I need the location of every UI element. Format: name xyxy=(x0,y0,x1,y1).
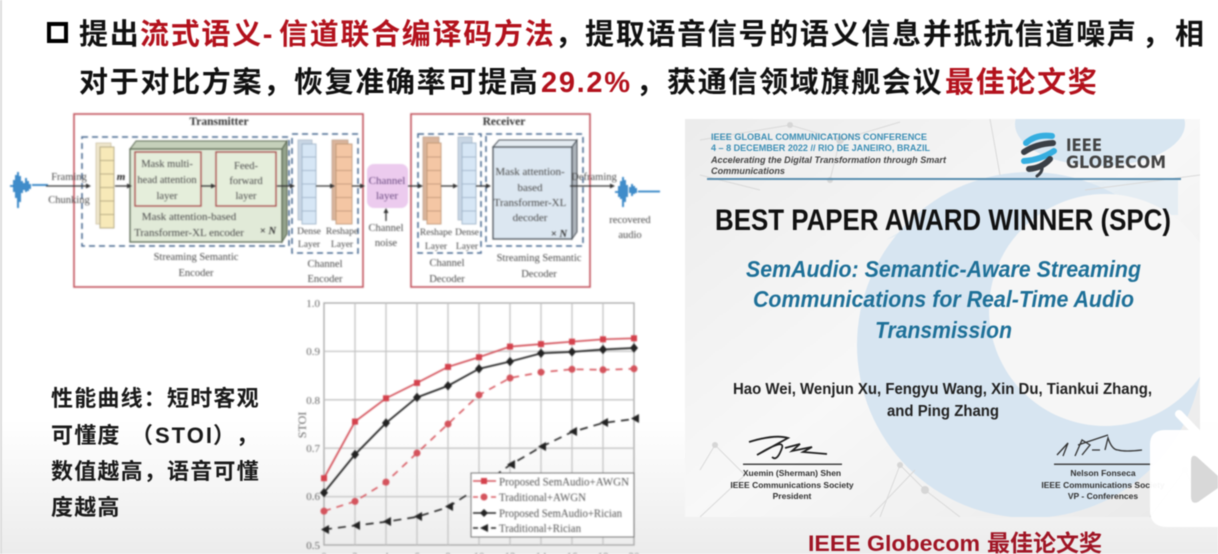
conference details: Accelerating the Digital Transformation through Smart xyxy=(710,155,947,165)
channel encoder group xyxy=(292,134,358,285)
heading line 2: 获通信领域旗舰会议 xyxy=(667,66,943,99)
series: proposed awgn xyxy=(321,335,637,481)
signature: president: Xuemin (Sherman) Shen xyxy=(743,468,841,478)
performance note: 性能曲线：短时客观 xyxy=(51,386,260,411)
heading xyxy=(49,18,1206,99)
streaming semantic encoder group xyxy=(82,137,289,246)
decoder block xyxy=(493,140,577,240)
decoder caption: Decoder xyxy=(521,269,557,280)
channel encoder labels xyxy=(297,227,358,285)
conference details: Communications xyxy=(711,166,785,176)
series: traditional rician xyxy=(321,414,639,534)
conference details: IEEE GLOBAL COMMUNICATIONS CONFERENCE xyxy=(711,132,927,142)
channel decoder labels: Decoder xyxy=(429,274,465,285)
recovered audio label: recovered xyxy=(609,215,651,226)
heading line 2: 29.2% xyxy=(541,67,632,99)
channel decoder labels: Layer xyxy=(425,242,448,252)
heading line 1: 相 xyxy=(1175,18,1206,51)
globecom wordmark: GLOBECOM xyxy=(1066,153,1166,173)
feed-forward layer: Feed- xyxy=(234,161,258,172)
signature: vp conferences xyxy=(1041,435,1165,501)
reshape layer stack xyxy=(332,140,352,224)
waveform: recovered audio xyxy=(615,177,660,207)
performance note: 可懂度 xyxy=(51,423,121,448)
panel: receiver xyxy=(411,114,590,287)
recovered audio label: audio xyxy=(618,230,642,241)
encoder label: Transformer-XL encoder xyxy=(134,227,244,239)
channel encoder labels: Layer xyxy=(331,240,354,250)
authors: Hao Wei, Wenjun Xu, Fengyu Wang, Xin Du, Tiankui Zhang, xyxy=(733,381,1152,398)
channel layer: layer xyxy=(376,190,398,202)
channel decoder labels: Dense xyxy=(455,228,479,238)
waveform: input audio xyxy=(10,172,48,208)
y axis labels: 0.5 xyxy=(306,540,320,552)
paper title: Communications for Real-Time Audio xyxy=(753,286,1134,312)
y axis title: STOI xyxy=(295,412,309,438)
encoder caption: Streaming Semantic xyxy=(154,252,239,263)
channel encoder labels: Reshape xyxy=(326,227,358,237)
heading line 2: ， xyxy=(636,67,667,99)
decoder block: based xyxy=(517,182,543,194)
series: proposed rician xyxy=(320,343,638,497)
heading line 1: ， xyxy=(555,19,586,51)
paper title xyxy=(746,256,1141,343)
decoder block: Transformer-XL xyxy=(494,197,567,209)
mask multi-head attention layer: layer xyxy=(156,191,178,202)
dense layer stack xyxy=(298,140,316,224)
channel noise label xyxy=(368,223,404,249)
mask multi-head attention layer: head attention xyxy=(137,175,197,186)
decoder caption xyxy=(497,253,582,280)
paper title: SemAudio: Semantic-Aware Streaming xyxy=(746,256,1141,282)
mask multi-head attention layer xyxy=(135,152,201,206)
legend: traditional awgn: Traditional+AWGN xyxy=(499,490,586,504)
decoder block: decoder xyxy=(513,212,548,224)
encoder label: Mask attention-based xyxy=(142,211,237,223)
performance note: STOI xyxy=(155,423,214,448)
decoder caption: Streaming Semantic xyxy=(497,253,582,264)
y axis labels: 0.7 xyxy=(306,443,320,455)
framing and chunking labels xyxy=(48,172,90,206)
legend: proposed awgn: Proposed SemAudio+AWGN xyxy=(499,474,629,488)
authors xyxy=(733,381,1152,420)
channel encoder labels: Layer xyxy=(298,240,321,250)
y axis labels: 0.9 xyxy=(306,346,320,358)
recovered audio label xyxy=(609,215,651,241)
input frame stack xyxy=(96,143,114,228)
signature: president: President xyxy=(773,491,812,501)
authors: and Ping Zhang xyxy=(887,403,999,420)
header rule xyxy=(707,178,1181,180)
certificate background xyxy=(685,118,1200,518)
heading line 1: ， xyxy=(1142,19,1173,51)
decoder block: Mask attention- xyxy=(495,166,565,178)
heading line 1: 信道联合编译码方法 xyxy=(279,18,555,51)
globecom wordmark: IEEE xyxy=(1066,136,1102,156)
channel encoder labels: Dense xyxy=(297,227,321,237)
heading line 1: 提取语音信号的语义信息并抵抗信道噪声 xyxy=(585,18,1138,51)
transmitter heading: Transmitter xyxy=(189,116,249,128)
channel encoder labels: Encoder xyxy=(308,274,343,285)
panel: transmitter xyxy=(74,114,363,287)
signature: president xyxy=(730,437,854,501)
channel decoder labels xyxy=(420,228,479,285)
channel noise label: Channel xyxy=(368,223,404,234)
award caption xyxy=(808,530,1102,554)
y axis labels: 1.0 xyxy=(306,298,320,310)
conference details: 4 – 8 DECEMBER 2022 // RIO DE JANEIRO, BRAZIL xyxy=(711,143,930,153)
receiver heading: Receiver xyxy=(483,116,525,128)
heading line 2: 对于对比方案，恢复准确率可提高 xyxy=(79,67,540,99)
feed-forward layer: layer xyxy=(236,191,257,202)
plot grid xyxy=(324,303,634,545)
performance note xyxy=(51,386,260,520)
framing and chunking labels: Framing xyxy=(51,172,88,183)
paper title: Transmission xyxy=(875,317,1012,343)
y axis labels: 0.6 xyxy=(306,491,320,503)
heading line 1: 流式语义- xyxy=(140,18,274,51)
encoder label: × N xyxy=(260,226,277,237)
signature: vp conferences: Nelson Fonseca xyxy=(1070,468,1136,478)
performance note: 数值越高，语音可懂 xyxy=(51,459,260,484)
deframing label: Deframing xyxy=(571,172,617,183)
channel decoder group xyxy=(418,134,481,285)
encoder caption xyxy=(154,252,239,279)
symbol m: m xyxy=(117,171,126,183)
performance note: （ xyxy=(131,423,154,448)
performance note: ， xyxy=(236,423,259,448)
channel layer xyxy=(367,164,408,208)
feed-forward layer: forward xyxy=(229,176,263,187)
signature: vp conferences: VP - Conferences xyxy=(1068,491,1138,501)
channel decoder labels: Reshape xyxy=(420,228,452,238)
chart legend xyxy=(471,473,634,537)
channel decoder labels: Channel xyxy=(430,258,465,269)
performance note: 度越高 xyxy=(51,495,121,520)
STOI line chart xyxy=(295,298,640,554)
channel layer: Channel xyxy=(369,175,405,187)
conference details xyxy=(710,132,947,176)
decoder block: × N xyxy=(551,229,568,240)
system architecture diagram xyxy=(10,114,660,287)
heading line 1: 提出 xyxy=(79,19,140,51)
y axis labels xyxy=(306,298,320,552)
series: traditional awgn xyxy=(320,365,638,515)
encoder label xyxy=(134,211,277,239)
channel noise label: noise xyxy=(375,238,397,249)
channel encoder labels: Channel xyxy=(308,259,343,270)
streaming semantic decoder group xyxy=(486,134,583,246)
x axis labels xyxy=(321,551,640,554)
legend: proposed rician: Proposed SemAudio+Rician xyxy=(499,506,622,520)
mask multi-head attention layer: Mask multi- xyxy=(141,159,193,170)
encoder caption: Encoder xyxy=(179,268,214,279)
signature: vp conferences: IEEE Communications Society xyxy=(1041,480,1165,490)
channel decoder labels: Layer xyxy=(456,242,479,252)
feed-forward layer xyxy=(216,152,276,206)
performance note: ） xyxy=(213,423,236,448)
reshape layer stack xyxy=(423,137,441,224)
signal flow arrows xyxy=(46,184,615,221)
globecom wordmark xyxy=(1066,136,1166,173)
framing and chunking labels: Chunking xyxy=(48,195,90,206)
heading line 2: 最佳论文奖 xyxy=(945,66,1099,99)
y axis labels: 0.8 xyxy=(306,395,320,407)
icon: globecom logo xyxy=(1024,136,1054,176)
signature: president: IEEE Communications Society xyxy=(730,480,854,490)
icon: video play watermark xyxy=(1150,414,1218,527)
legend: traditional rician: Traditional+Rician xyxy=(499,521,581,535)
dense layer stack xyxy=(458,137,476,224)
bullet square xyxy=(49,24,66,41)
award certificate xyxy=(685,118,1200,518)
encoder block xyxy=(130,141,287,242)
